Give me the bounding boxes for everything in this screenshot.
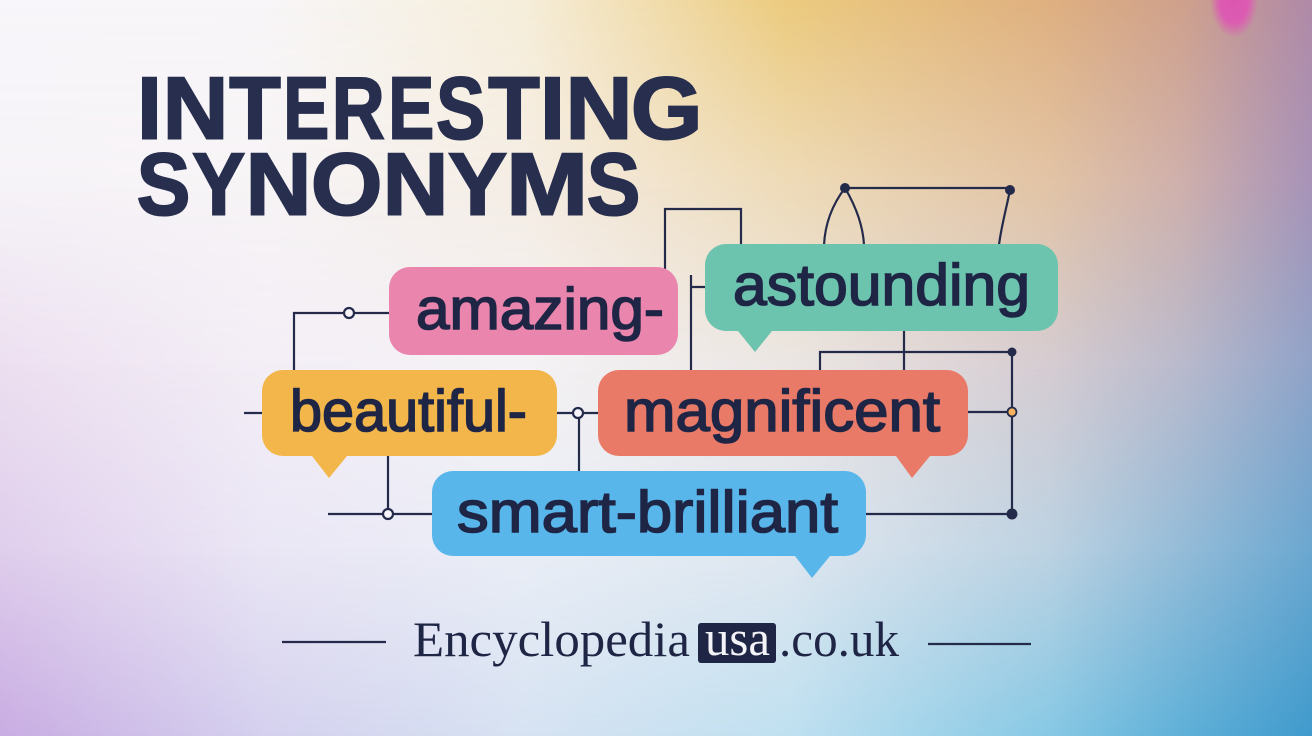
- bubble: amazing: amazing-: [416, 277, 664, 342]
- title: G: [631, 58, 702, 158]
- title: I: [540, 58, 565, 158]
- title: N: [246, 134, 311, 234]
- footer brand: [282, 610, 1031, 667]
- bubble: smart-brilliant: smart-brilliant: [457, 480, 838, 545]
- title: O: [311, 134, 382, 234]
- title: S: [137, 134, 190, 234]
- title: [137, 58, 703, 234]
- title: N: [163, 58, 228, 158]
- title: S: [436, 58, 485, 158]
- title: T: [229, 58, 281, 158]
- bubble: beautiful: beautiful-: [290, 379, 527, 444]
- footer brand: Encyclopedia: [413, 611, 690, 667]
- title: M: [506, 134, 588, 234]
- title: S: [587, 134, 640, 234]
- title: Y: [192, 134, 245, 234]
- title: N: [383, 134, 448, 234]
- title: N: [566, 58, 632, 158]
- bubble: astounding: astounding: [733, 253, 1030, 318]
- title: R: [332, 58, 385, 158]
- bubble: astounding: [705, 244, 1058, 352]
- bubble: amazing: [389, 267, 678, 355]
- title: I: [137, 58, 162, 158]
- bubble: smart-brilliant: [432, 471, 866, 578]
- footer brand: .co.uk: [779, 611, 899, 667]
- footer brand: usa: [705, 610, 770, 666]
- title: T: [488, 58, 540, 158]
- background gradient: [342, 0, 1312, 352]
- connector lines: [244, 183, 1018, 520]
- bubble: magnificent: magnificent: [624, 379, 940, 444]
- title: Y: [448, 134, 507, 234]
- bubble: beautiful: [262, 370, 557, 478]
- pink smudge top right: [1204, 0, 1264, 40]
- title: E: [283, 58, 329, 158]
- title: E: [388, 58, 434, 158]
- bubble: magnificent: [598, 370, 968, 478]
